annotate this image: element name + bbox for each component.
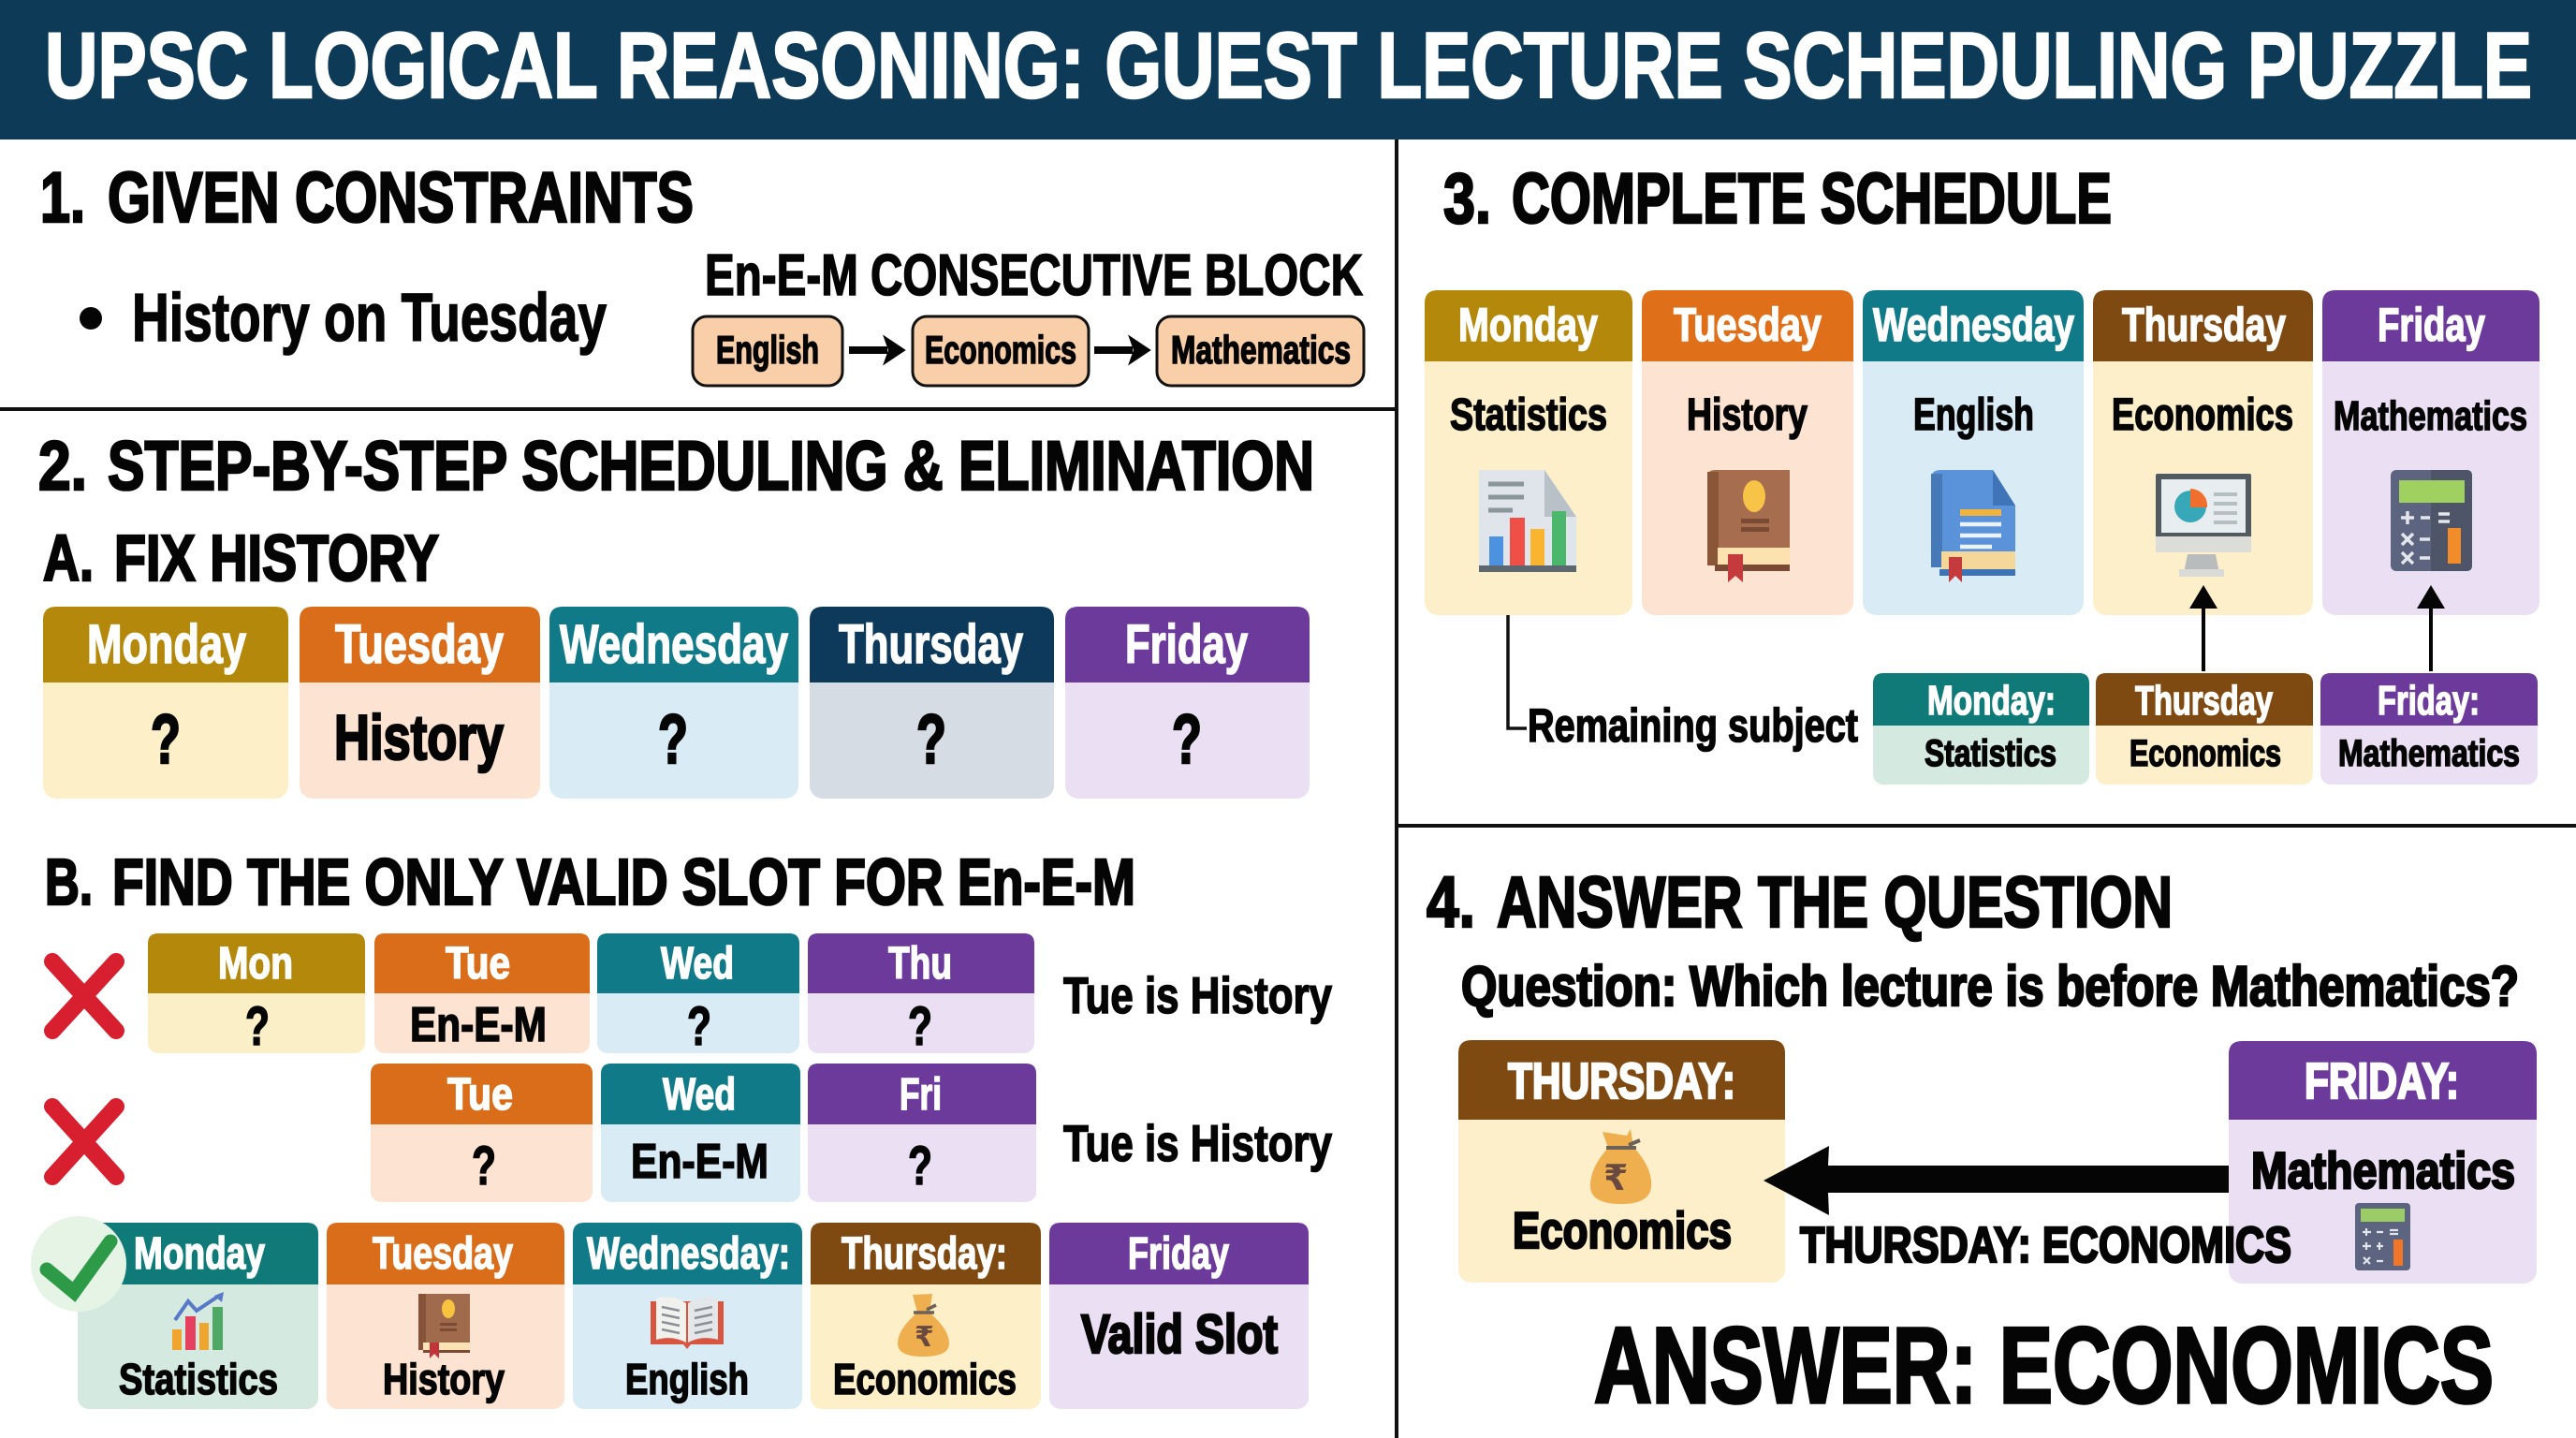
pill: English [693,316,842,386]
column: Wednesday English: English [1913,390,2034,440]
icon: brown book [1707,470,1790,582]
card: Wed En-E-M [601,1064,800,1202]
icon: statistics chart [172,1292,224,1350]
panel: 3. complete schedule [1425,159,2539,785]
card: Wed En-E-M: Wed [663,1070,736,1120]
pill: Economics: Economics [925,328,1076,372]
attempt row 2 [371,1064,1036,1202]
card: Friday Mathematics: Mathematics [2251,1141,2515,1199]
day card: Wednesday ?: ? [658,700,688,778]
pill: Economics [913,316,1089,386]
valid row [78,1223,1309,1409]
day card: Thursday ? [810,607,1054,799]
card: Monday Statistics: Monday [134,1229,265,1279]
subheading: fix history: A. [43,521,94,594]
card: Thu: ? [908,996,932,1057]
mini card: Monday Statistics: Monday: [1927,678,2056,724]
column: Thursday Economics: Thursday [2122,299,2286,351]
card: Tue En-E-M: En-E-M [410,998,547,1052]
column: Friday Mathematics: Mathematics [2334,393,2527,439]
heading: complete schedule: COMPLETE SCHEDULE [1512,159,2112,239]
connector: remaining subject [1508,615,1527,728]
subheading: find the only valid slot: FIND THE ONLY VALID SLOT FOR En-E-M [112,845,1135,918]
mini card: Monday Statistics: Statistics [1925,733,2056,774]
day card: Tuesday History [300,607,540,799]
note: tue is history 2: Tue is History [1063,1114,1332,1172]
icon: report chart [1479,470,1576,572]
mini card: Friday Mathematics: Mathematics [2338,733,2520,774]
heading: consecutive block: En-E-M CONSECUTIVE BLOCK [705,243,1363,308]
day card: Friday ? [1065,607,1310,799]
card: Wed: Wed [661,939,734,989]
column: Friday Mathematics: Friday [2378,299,2485,351]
card: Fri: Fri [900,1070,942,1120]
day card: Wednesday ?: Wednesday [560,614,788,675]
card: Tue En-E-M: Tue [446,939,510,989]
arrow: Friday to Thursday [1764,1146,2229,1215]
panel: 4. answer the question [1427,862,2537,1426]
pill: English: English [716,328,819,372]
card: Tue: Tue [447,1070,513,1120]
icon: red cross 2 [52,1107,116,1177]
icon: money bag: ₹ [1603,1157,1628,1198]
icon: money bag [898,1294,949,1357]
subheading: find the only valid slot: B. [45,845,93,918]
mini card: Friday Mathematics [2320,673,2538,785]
mini card: Thursday Economics: Economics [2130,733,2281,774]
card: Thu: Thu [888,939,952,989]
panel: 1. given constraints [40,158,1364,386]
card: Mon: Mon [218,939,293,989]
icon: money bag: ₹ [915,1321,934,1354]
arrow: to Friday [2417,585,2445,671]
subheading: fix history: FIX HISTORY [114,521,439,594]
card: Thu [808,933,1034,1057]
column: Wednesday English [1863,290,2084,615]
card: Tue En-E-M [374,933,590,1053]
bullet: history on Tuesday: History on Tuesday [132,281,607,356]
heading: complete schedule: 3. [1443,159,1491,239]
panel: 2. step-by-step scheduling [31,427,1332,1409]
subheading: fix history [43,521,439,594]
card: Friday Valid Slot: Friday [1128,1229,1229,1279]
card: Friday Valid Slot: Valid Slot [1081,1304,1278,1365]
card: Mon: ? [245,996,270,1057]
column: Thursday Economics [2093,290,2313,615]
day card: Tuesday History: Tuesday [335,614,504,675]
heading: step-by-step: 2. [38,427,87,505]
icon: money bag [1590,1129,1651,1204]
card: Tue: ? [472,1136,496,1196]
heading: given constraints: 1. [40,158,85,238]
icon: monitor pie chart [2156,474,2251,577]
arrow: English to Economics [849,337,904,363]
card: Wednesday English: Wednesday: [587,1229,790,1279]
card: Thursday Economics [1458,1040,1785,1283]
mini card: Friday Mathematics: Friday: [2378,678,2480,724]
card: Monday Statistics [78,1223,318,1409]
label: thursday economics: THURSDAY: ECONOMICS [1800,1217,2291,1273]
mini card: Thursday Economics: Thursday [2135,678,2273,724]
icon: history book [418,1294,470,1358]
card: Wed: ? [687,996,711,1057]
icon: green check [31,1216,126,1312]
day card: Thursday ?: Thursday [839,614,1023,675]
column: Tuesday History [1642,290,1853,615]
card: Thursday Economics: Economics [833,1355,1017,1403]
card: Wed [597,933,799,1057]
arrow: to Thursday [2189,585,2217,671]
mini card: Thursday Economics [2096,673,2313,785]
day card: Tuesday History: History [334,702,504,773]
card: Fri [808,1064,1036,1202]
card: Tuesday History: History [383,1355,505,1403]
day card: Friday ?: ? [1172,700,1202,778]
column: Monday Statistics [1425,290,1632,615]
icon: red cross 1 [52,961,116,1031]
day card: Wednesday ? [549,607,798,799]
attempt row 1 [148,933,1034,1057]
mini card: Monday Statistics [1873,673,2089,785]
heading: complete schedule [1443,159,2112,239]
card: Monday Statistics: Statistics [119,1355,278,1403]
card: Wednesday English [573,1223,802,1409]
column: Tuesday History: Tuesday [1674,299,1822,351]
card: Tue [371,1064,593,1202]
heading: given constraints: GIVEN CONSTRAINTS [108,158,694,238]
pill: Mathematics: Mathematics [1171,328,1351,372]
icon: calculator [2355,1203,2410,1270]
heading: step-by-step: STEP-BY-STEP SCHEDULING & ELIMINATION [108,427,1314,505]
icon: open book [651,1297,724,1349]
column: Monday Statistics: Statistics [1450,390,1607,440]
day card: Monday ?: Monday [87,614,246,675]
card: Tuesday History: Tuesday [373,1229,513,1279]
day card: Thursday ?: ? [916,700,946,778]
card: Thursday Economics: THURSDAY: [1508,1053,1735,1109]
day card: Monday ?: ? [151,700,181,778]
card: Fri: ? [908,1136,932,1196]
label: remaining subject: Remaining subject [1528,699,1858,752]
column: Friday Mathematics [2322,290,2539,615]
day card: Monday ? [43,607,288,799]
card: Mon [148,933,365,1057]
card: Wednesday English: English [625,1355,749,1403]
note: tue is history 1: Tue is History [1063,966,1332,1024]
card: Thursday Economics: Economics [1513,1201,1732,1259]
card: Wed En-E-M: En-E-M [631,1135,768,1189]
card: Tuesday History [327,1223,564,1409]
column: Tuesday History: History [1687,390,1808,440]
pill: Mathematics [1157,316,1364,386]
card: Friday Valid Slot [1049,1223,1309,1409]
arrow: Economics to Mathematics [1094,337,1149,363]
icon: blue book [1931,470,2015,582]
day card: Friday ?: Friday [1125,614,1248,675]
card: Friday Mathematics: FRIDAY: [2305,1053,2459,1109]
column: Thursday Economics: Economics [2112,390,2293,440]
heading: answer the question: ANSWER THE QUESTION [1497,862,2173,943]
heading: answer the question: 4. [1427,862,1475,943]
card: Thursday Economics [811,1223,1041,1409]
card: Friday Mathematics [2229,1041,2537,1284]
column: Wednesday English: Wednesday [1873,299,2074,351]
column: Monday Statistics: Monday [1458,299,1598,351]
card: Thursday Economics: Thursday: [842,1229,1007,1279]
icon: calculator [2391,470,2472,571]
